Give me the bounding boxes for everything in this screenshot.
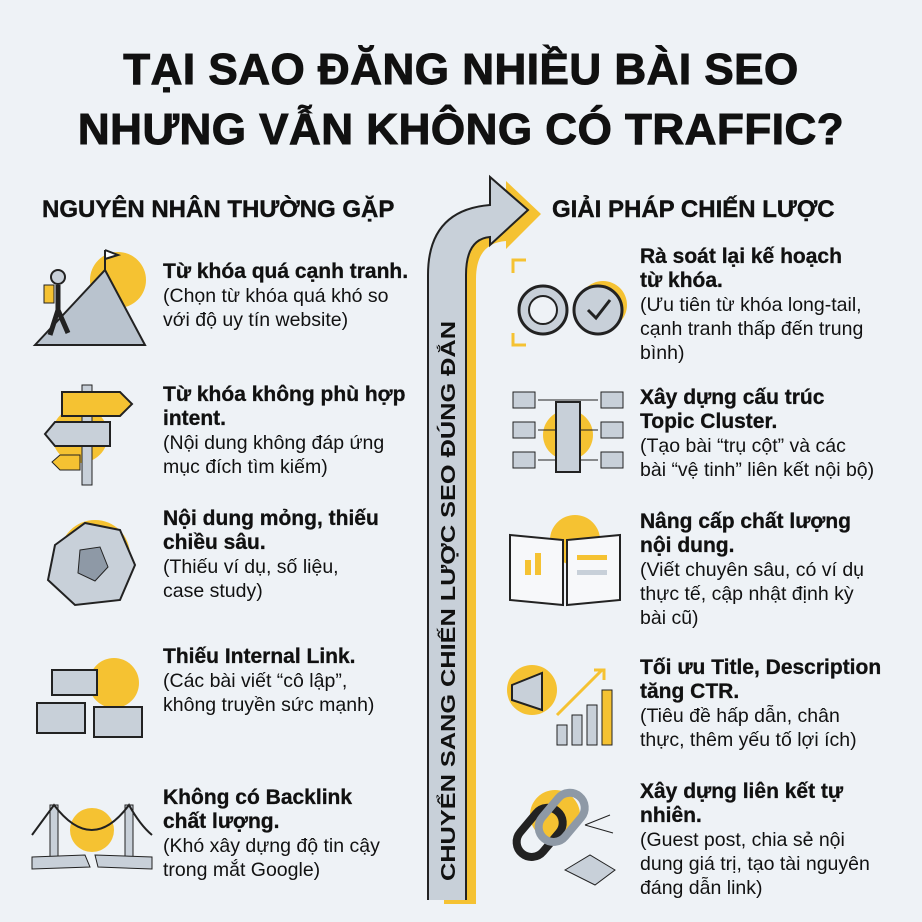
item: keyword plan: Rà soát lại kế hoạch bbox=[640, 245, 842, 268]
item: topic cluster: Topic Cluster. bbox=[640, 410, 777, 433]
title: NHƯNG VẪN KHÔNG CÓ TRAFFIC? bbox=[78, 105, 844, 154]
item: topic cluster: bài “vệ tinh” liên kết nội bộ) bbox=[640, 459, 874, 481]
item: competitive keywords: (Chọn từ khóa quá khó so bbox=[163, 285, 389, 307]
icon: rock bbox=[46, 520, 136, 606]
item: content quality: nội dung. bbox=[640, 534, 734, 557]
item: topic cluster: Xây dựng cấu trúc bbox=[640, 386, 824, 409]
heading: solutions: GIẢI PHÁP CHIẾN LƯỢC bbox=[552, 196, 835, 223]
item: natural links: Xây dựng liên kết tự bbox=[640, 780, 843, 803]
central arrow bbox=[427, 174, 541, 904]
item: keyword plan: cạnh tranh thấp đến trung bbox=[640, 318, 863, 340]
item: natural links: nhiên. bbox=[640, 804, 702, 827]
item: thin content: Nội dung mỏng, thiếu bbox=[163, 507, 379, 530]
item: keyword plan bbox=[640, 245, 863, 364]
item: content quality bbox=[640, 510, 864, 629]
item: natural links: (Guest post, chia sẻ nội bbox=[640, 829, 845, 851]
item: competitive keywords: Từ khóa quá cạnh tranh. bbox=[163, 260, 408, 283]
item: internal link: Thiếu Internal Link. bbox=[163, 645, 356, 668]
item: CTR: thực, thêm yếu tố lợi ích) bbox=[640, 729, 857, 751]
item: backlink: (Khó xây dựng độ tin cậy bbox=[163, 835, 380, 857]
title: TẠI SAO ĐĂNG NHIỀU BÀI SEO bbox=[123, 45, 799, 94]
item: content quality: thực tế, cập nhật định kỳ bbox=[640, 583, 854, 605]
item: keyword plan: bình) bbox=[640, 342, 684, 364]
item: natural links: đáng dẫn link) bbox=[640, 877, 763, 899]
item: natural links bbox=[640, 780, 870, 899]
panel: causes bbox=[31, 249, 408, 881]
icon: topic cluster bbox=[512, 392, 624, 473]
item: CTR: tăng CTR. bbox=[640, 680, 739, 703]
icon: binoculars bbox=[512, 258, 627, 346]
item: thin content: (Thiếu ví dụ, số liệu, bbox=[163, 556, 339, 578]
item: thin content bbox=[163, 507, 379, 602]
item: thin content: chiều sâu. bbox=[163, 531, 266, 554]
icon: mountain climber bbox=[32, 249, 147, 346]
heading: causes: NGUYÊN NHÂN THƯỜNG GẶP bbox=[42, 196, 394, 223]
item: competitive keywords: với độ uy tín website) bbox=[163, 309, 348, 331]
icon: chain link handshake bbox=[512, 788, 616, 886]
item: topic cluster: (Tạo bài “trụ cột” và các bbox=[640, 435, 846, 457]
panel: solutions bbox=[507, 245, 881, 899]
item: backlink: trong mắt Google) bbox=[163, 859, 320, 881]
item: internal link: không truyền sức mạnh) bbox=[163, 694, 374, 716]
icon: blocks bbox=[36, 658, 143, 738]
item: content quality: (Viết chuyên sâu, có ví dụ bbox=[640, 559, 864, 581]
item: CTR: Tối ưu Title, Description bbox=[640, 656, 881, 679]
item: backlink: Không có Backlink bbox=[163, 786, 352, 809]
item: intent bbox=[163, 383, 405, 478]
item: backlink bbox=[163, 786, 380, 881]
item: intent: Từ khóa không phù hợp bbox=[163, 383, 405, 406]
title bbox=[78, 44, 844, 154]
item: keyword plan: từ khóa. bbox=[640, 269, 723, 292]
item: topic cluster bbox=[640, 386, 874, 481]
item: thin content: case study) bbox=[163, 580, 263, 602]
item: internal link bbox=[163, 645, 374, 716]
item: intent: mục đích tìm kiếm) bbox=[163, 456, 328, 478]
item: CTR bbox=[640, 656, 881, 751]
central arrow: CHUYỂN SANG CHIẾN LƯỢC SEO ĐÚNG ĐẮN bbox=[436, 321, 460, 881]
icon: megaphone chart bbox=[507, 665, 612, 746]
item: backlink: chất lượng. bbox=[163, 810, 279, 833]
icon: signpost bbox=[44, 384, 134, 486]
item: content quality: bài cũ) bbox=[640, 607, 699, 629]
item: internal link: (Các bài viết “cô lập”, bbox=[163, 670, 347, 692]
item: intent: intent. bbox=[163, 407, 226, 430]
icon: book bbox=[509, 515, 621, 606]
icon: broken bridge bbox=[31, 803, 153, 870]
item: competitive keywords bbox=[163, 260, 408, 331]
item: natural links: dung giá trị, tạo tài nguyên bbox=[640, 853, 870, 875]
item: CTR: (Tiêu đề hấp dẫn, chân bbox=[640, 705, 840, 727]
item: keyword plan: (Ưu tiên từ khóa long-tail, bbox=[640, 294, 862, 316]
item: intent: (Nội dung không đáp ứng bbox=[163, 432, 384, 454]
item: content quality: Nâng cấp chất lượng bbox=[640, 510, 851, 533]
